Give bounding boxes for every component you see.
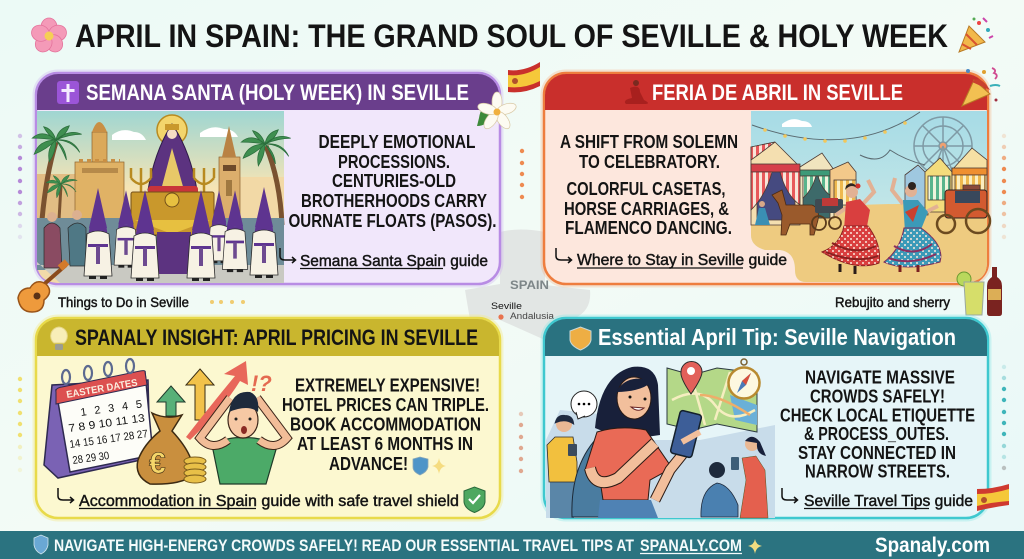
candelabras (131, 168, 214, 192)
description text: HOTEL PRICES CAN TRIPLE. (282, 395, 489, 415)
title text: APRIL IN SPAIN: THE GRAND SOUL OF SEVILLE & HOLY WEEK (75, 18, 948, 54)
panel: Feria de Abril (544, 73, 990, 284)
panel header bar (545, 319, 987, 356)
icon: sparkle (748, 539, 762, 554)
woman with phone (572, 367, 702, 518)
description text: ADVANCE! (329, 454, 408, 474)
dancer in blue (884, 178, 941, 272)
description text (780, 368, 975, 482)
bunting (752, 112, 925, 165)
icon: light bulb (51, 327, 67, 350)
icon: party popper (962, 68, 1000, 106)
title (29, 18, 993, 55)
decorative dots (18, 134, 1006, 473)
illustration: fairground (751, 111, 990, 282)
icon: shield (34, 535, 48, 554)
description text: & PROCESS_OUTES. (804, 424, 949, 444)
description text: NAVIGATE MASSIVE (805, 368, 955, 388)
illustration: shocked person (200, 392, 287, 484)
description text: CENTURIES-OLD (332, 171, 456, 191)
illustration: calendar: 1 2 3 4 5 (80, 398, 143, 419)
casetas right (905, 148, 987, 215)
map of Spain (465, 230, 590, 340)
description text (288, 132, 496, 231)
footer brand: Spanaly.com (875, 534, 990, 557)
icon: shield and sparkle (413, 457, 446, 475)
description text: STAY CONNECTED IN (798, 443, 956, 463)
panel header bar (37, 319, 499, 356)
seated man (701, 462, 738, 517)
carriage right (937, 190, 990, 233)
map label: SPAIN: SPAIN (510, 278, 549, 292)
footer bar (0, 531, 1024, 559)
icon: party popper (959, 18, 993, 52)
woman in red dress (731, 437, 768, 518)
nazarenos (84, 187, 278, 281)
description text: HORSE CARRIAGES, & (564, 199, 729, 219)
illustration: calendar: 7 8 9 10 11 13 (68, 412, 146, 435)
icon: cross (57, 81, 79, 104)
description text: PROCESSIONS. (338, 152, 450, 172)
illustration: calendar (44, 359, 153, 478)
icon: guitar (18, 262, 67, 312)
description text: TO CELEBRATORY. (579, 152, 720, 172)
map marker: Andalusia: Andalusia (510, 311, 554, 321)
icon: exclamation: !? (251, 371, 272, 396)
casetas left (751, 142, 856, 225)
map (667, 368, 757, 432)
Virgin statue (148, 115, 197, 190)
description text: DEEPLY EMOTIONAL (318, 132, 476, 152)
illustration: rising arrows (157, 361, 248, 440)
panel: Essential April tip (544, 318, 1009, 518)
figure in blue (755, 201, 770, 225)
description text: FLAMENCO DANCING. (565, 218, 732, 238)
icon: Spanish flag (508, 62, 540, 92)
icon: green check shield (464, 487, 485, 512)
float (131, 186, 214, 274)
description text: NARROW STREETS. (805, 462, 950, 482)
panel: Spanaly insight (36, 318, 500, 518)
panel: Semana Santa (32, 73, 500, 284)
description text: EXTREMELY EXPENSIVE! (295, 376, 480, 396)
guide link (280, 248, 488, 270)
guide link: Accommodation in Spain guide with safe travel shield (79, 493, 459, 510)
description text: BOOK ACCOMMODATION (290, 414, 481, 434)
description text: OURNATE FLOATS (PASOS). (288, 211, 496, 231)
illustration: calendar: 28 29 30 (72, 450, 110, 467)
panel heading: Essential April Tip: Seville Navigation (598, 324, 956, 350)
speech bubble (571, 391, 597, 419)
panel header bar (37, 74, 499, 110)
guide link: Where to Stay in Seville guide (577, 252, 787, 269)
caption: Things to Do: Things to Do in Seville (58, 294, 189, 310)
caption: Rebujito: Rebujito and sherry (835, 294, 950, 310)
horse and carriage (772, 190, 843, 235)
description text: CROWDS SAFELY! (810, 386, 945, 406)
guide link: Semana Santa Spain guide (300, 253, 488, 270)
palm trees (32, 126, 291, 225)
map label: Seville: Seville (491, 301, 522, 311)
illustration: calendar: 14 15 16 17 28 27 (69, 428, 149, 451)
guide link (782, 488, 973, 510)
footer link: SPANALY.COM (640, 536, 742, 555)
Torre del Oro (75, 122, 124, 222)
icon: Spanish flag (977, 484, 1009, 511)
illustration: calendar: EASTER DATES (66, 378, 139, 401)
panel heading: SEMANA SANTA (HOLY WEEK) IN SEVILLE (86, 80, 469, 105)
icon: flamenco dancer (625, 80, 648, 104)
monks (44, 210, 86, 268)
compass (728, 359, 760, 398)
Giralda (219, 126, 240, 222)
illustration: navigating crowd (546, 359, 775, 518)
panel heading: SPANALY INSIGHT: APRIL PRICING IN SEVILLE (75, 325, 478, 350)
description text: A SHIFT FROM SOLEMN (560, 132, 738, 152)
icon: drinks (957, 267, 1002, 316)
description text (560, 132, 738, 238)
dancer in red (822, 180, 880, 274)
description text (282, 376, 489, 474)
illustration: money bag (137, 413, 206, 484)
illustration: money bag: € (149, 447, 166, 480)
icon: jasmine flower (476, 92, 518, 131)
icon: pink flower (29, 18, 69, 55)
ferris wheel (914, 117, 972, 195)
description text: AT LEAST 6 MONTHS IN (297, 434, 473, 454)
description text: COLORFUL CASETAS, (566, 179, 726, 199)
illustration: Holy Week procession (32, 111, 291, 283)
panel heading: FERIA DE ABRIL IN SEVILLE (652, 80, 903, 105)
description text: BROTHERHOODS CARRY (301, 191, 487, 211)
map pin (681, 362, 702, 394)
panel header bar (545, 74, 987, 110)
guide link: Seville Travel Tips guide (804, 493, 973, 510)
footer message: NAVIGATE HIGH-ENERGY CROWDS SAFELY! READ OUR ESSENTIAL TRAVEL TIPS AT (54, 536, 634, 555)
man in yellow (547, 416, 577, 518)
description text: CHECK LOCAL ETIQUETTE (780, 406, 975, 426)
icon: gold shield (570, 327, 591, 350)
